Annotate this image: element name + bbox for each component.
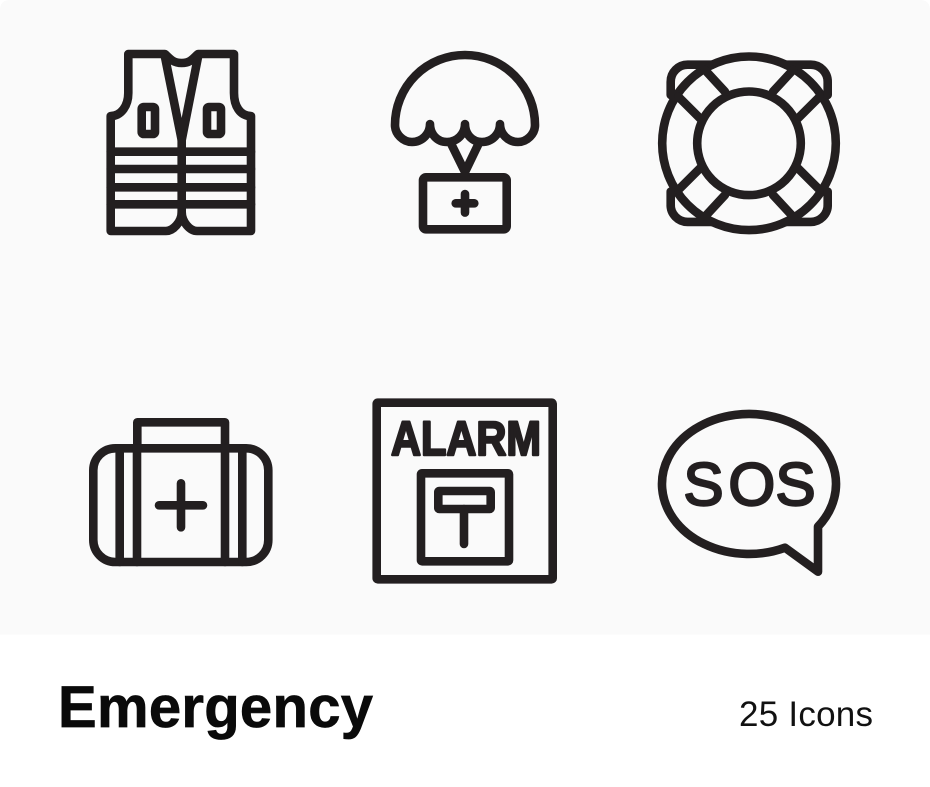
SOS label: SOS	[684, 451, 816, 518]
alarm label: ALARM	[391, 413, 541, 466]
icon: first aid kit	[93, 422, 268, 562]
icon: safety vest	[111, 54, 251, 231]
icon: life buoy	[662, 56, 836, 230]
icon: alarm box	[377, 403, 553, 579]
title: Emergency	[58, 675, 373, 740]
alarm handle panel	[421, 473, 509, 561]
icon: parachute with medical box	[395, 55, 535, 229]
icon count: 25 Icons	[739, 695, 873, 734]
icon: SOS speech bubble	[662, 414, 836, 572]
